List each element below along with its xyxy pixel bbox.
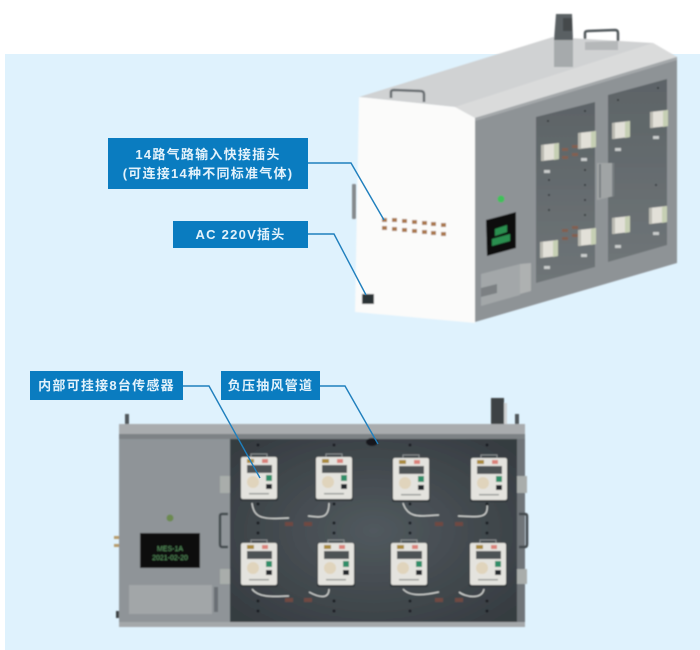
label: 14 gas inputs: 14路气路输入快接插头 xyxy=(135,147,281,162)
display xyxy=(140,533,200,568)
status LED xyxy=(166,514,174,522)
sensors in windows xyxy=(540,110,668,258)
display xyxy=(486,212,516,256)
rear handle xyxy=(585,30,618,42)
interior xyxy=(230,439,517,622)
front handle xyxy=(391,90,424,102)
label: 14 gas inputs xyxy=(108,138,308,189)
panel mount points xyxy=(547,87,659,216)
lower recess xyxy=(129,585,212,614)
top connectors xyxy=(125,398,519,424)
side gas ports xyxy=(114,536,119,547)
negative pressure duct xyxy=(366,438,378,446)
label: eight sensors: 内部可挂接8台传感器 xyxy=(38,378,175,393)
hinges xyxy=(220,476,527,584)
valves and mount points xyxy=(256,444,488,612)
label: negative pressure duct: 负压抽风管道 xyxy=(228,378,313,393)
leader lines xyxy=(183,163,384,478)
top strip xyxy=(119,424,525,434)
label: eight sensors xyxy=(30,371,183,400)
label: negative pressure duct xyxy=(221,371,320,400)
gas input connectors xyxy=(382,218,446,236)
window panel 2 xyxy=(608,79,667,262)
tubing xyxy=(252,503,487,596)
device: front view xyxy=(114,398,527,627)
status LED xyxy=(498,196,504,202)
display: 2021-02-20 xyxy=(152,555,188,562)
top face xyxy=(359,37,677,118)
sensors xyxy=(240,454,508,587)
device: perspective view xyxy=(352,14,677,323)
side handle xyxy=(352,184,356,219)
label: AC 220V plug xyxy=(173,221,308,248)
label: 14 gas inputs: (可连接14种不同标准气体) xyxy=(123,166,293,181)
valves xyxy=(562,145,578,240)
display: MES-1A xyxy=(157,546,183,553)
body xyxy=(119,424,525,627)
fittings xyxy=(544,136,659,269)
AC plug xyxy=(362,294,374,304)
connector on top xyxy=(554,14,573,67)
door handles xyxy=(220,514,228,547)
white face xyxy=(355,97,475,323)
lower recess xyxy=(481,264,520,306)
label: AC 220V plug: AC 220V插头 xyxy=(196,227,286,242)
centre handle xyxy=(597,163,614,200)
right face xyxy=(475,57,677,322)
window panel 1 xyxy=(536,102,595,283)
